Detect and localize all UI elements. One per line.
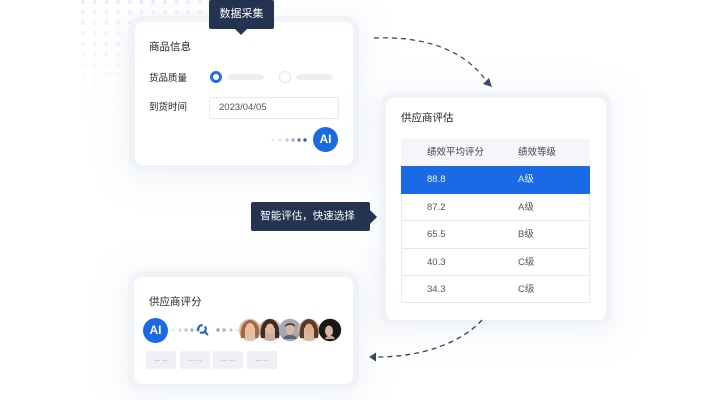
heading: product info: 商品信息: [149, 40, 191, 52]
background dot pattern: [81, 0, 202, 76]
callout: smart evaluation: 智能评估，快速选择: [260, 210, 355, 222]
date input: [209, 97, 339, 119]
row 65.5: B级: [518, 229, 534, 240]
AI badge: AI: [320, 132, 332, 146]
panel: product info: [135, 22, 353, 165]
tooltip: data collection: 数据采集: [220, 8, 264, 20]
row 87.2: A级: [518, 202, 534, 213]
row 40.3: [401, 249, 590, 276]
row 34.3: [401, 276, 590, 303]
row 40.3: 40.3: [427, 257, 446, 268]
table header: 绩效等级: [518, 147, 556, 158]
tag chip 3: ... ...: [221, 356, 235, 363]
row 34.3: 34.3: [427, 284, 446, 295]
row 87.2: [401, 194, 590, 221]
label: goods quality: 货品质量: [149, 73, 187, 84]
AI badge: [143, 318, 168, 343]
dots: [272, 138, 307, 142]
row 87.2: 87.2: [427, 202, 446, 213]
tag chip 3: [213, 351, 243, 369]
highlighted row: 88.8: [427, 174, 446, 185]
avatar 4: [298, 319, 320, 341]
row 65.5: [401, 221, 590, 249]
avatar 5: [319, 319, 341, 341]
label: arrival time: 到货时间: [149, 102, 187, 113]
heading: supplier score: 供应商评分: [149, 296, 202, 308]
radio selected: [210, 71, 222, 83]
panel: supplier evaluation: [386, 98, 606, 320]
tag chip 2: [180, 351, 210, 369]
date input: 2023/04/05: [219, 102, 267, 113]
avatar 3: [279, 319, 301, 341]
supplier avatars: [238, 318, 342, 342]
avatar 2: [259, 319, 281, 341]
highlighted row: [401, 166, 590, 194]
tag chip 4: ... ...: [255, 356, 269, 363]
arrow: to supplier score: [369, 320, 482, 362]
tooltip: data collection: [209, 0, 274, 29]
table header: 绩效平均评分: [427, 147, 484, 158]
tag chip 4: [247, 351, 277, 369]
table header: [401, 139, 590, 166]
heading: supplier evaluation: 供应商评估: [401, 112, 454, 124]
avatar 1: [239, 319, 261, 341]
tag chip 1: [146, 351, 176, 369]
radio option bar: [227, 74, 264, 80]
radio unselected: [279, 71, 291, 83]
panel: supplier score: [134, 277, 353, 384]
callout: smart evaluation: [251, 202, 370, 231]
row 40.3: C级: [518, 257, 534, 268]
arrow: to evaluation: [374, 37, 492, 87]
row 34.3: C级: [518, 284, 534, 295]
row 65.5: 65.5: [427, 229, 446, 240]
AI badge: [313, 127, 338, 152]
highlighted row: A级: [518, 174, 534, 185]
tag chip 1: ... ...: [154, 356, 168, 363]
dots and search icon: [172, 324, 238, 336]
tag chip 2: ... ...: [188, 356, 202, 363]
AI badge: AI: [150, 323, 162, 337]
table: [401, 139, 590, 302]
radio option bar 2: [296, 74, 333, 80]
